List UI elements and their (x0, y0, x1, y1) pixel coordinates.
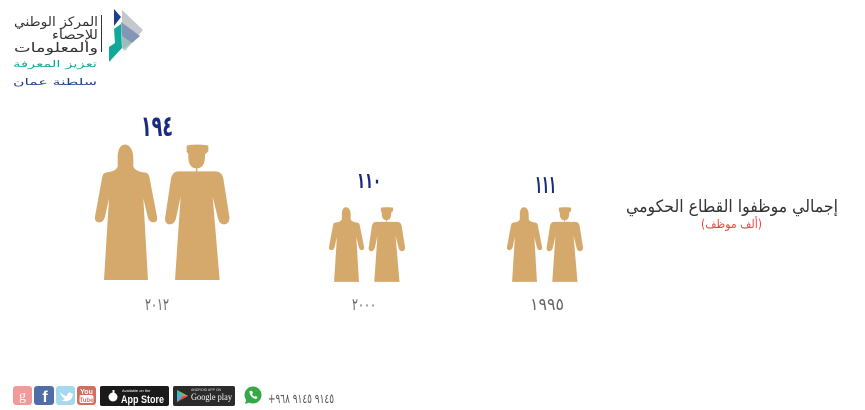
logo (13, 9, 143, 88)
footer (13, 386, 334, 407)
figures 1995 (507, 207, 583, 282)
year 2000: ٢٠٠٠ (352, 295, 376, 315)
logo emblem (109, 9, 143, 62)
badge: google play (173, 386, 235, 406)
figure group 2012 (95, 109, 229, 315)
value 2000: ١١٠ (357, 169, 381, 194)
figure group 2000 (329, 169, 405, 315)
figures 2012 (95, 145, 229, 280)
badge: app store (100, 386, 169, 406)
figure group 1995 (507, 170, 583, 315)
icon: youtube: You (80, 389, 93, 396)
icon: google plus (13, 386, 32, 405)
badge: google play: Google play (191, 392, 232, 402)
icon: whatsapp (244, 386, 262, 404)
value 2012: ١٩٤ (141, 109, 173, 143)
figures 2000 (329, 207, 405, 282)
logo name: والمعلومات (14, 41, 98, 56)
subtitle: (ألف موظف) (701, 216, 762, 232)
icon: twitter (56, 386, 75, 405)
logo divider (101, 15, 102, 52)
logo slogan: تعزيز المعرفة (13, 60, 98, 70)
icon: youtube (77, 386, 96, 405)
icon: facebook (34, 386, 54, 406)
icon: facebook: f (42, 389, 48, 406)
title: إجمالي موظفوا القطاع الحكومي (626, 197, 838, 217)
phone number: +٩٦٨ ٩١٤٥ ٩١٤٥ (268, 392, 334, 407)
logo name: المركز الوطني (14, 15, 98, 30)
icon: youtube: Tube (80, 398, 94, 404)
figure group 1995: ١١١ (535, 170, 556, 199)
badge: app store: App Store (121, 394, 164, 406)
icon: google plus: g (19, 389, 26, 404)
badge: google play: ANDROID APP ON (191, 388, 222, 392)
year 2012: ٢٠١٢ (145, 295, 169, 315)
logo name (14, 15, 98, 56)
logo name: للإحصاء (52, 28, 98, 43)
year 1995: ١٩٩٥ (530, 295, 564, 315)
logo country: سلطنة عمان (13, 78, 97, 88)
badge: app store: Available on the (122, 388, 151, 393)
